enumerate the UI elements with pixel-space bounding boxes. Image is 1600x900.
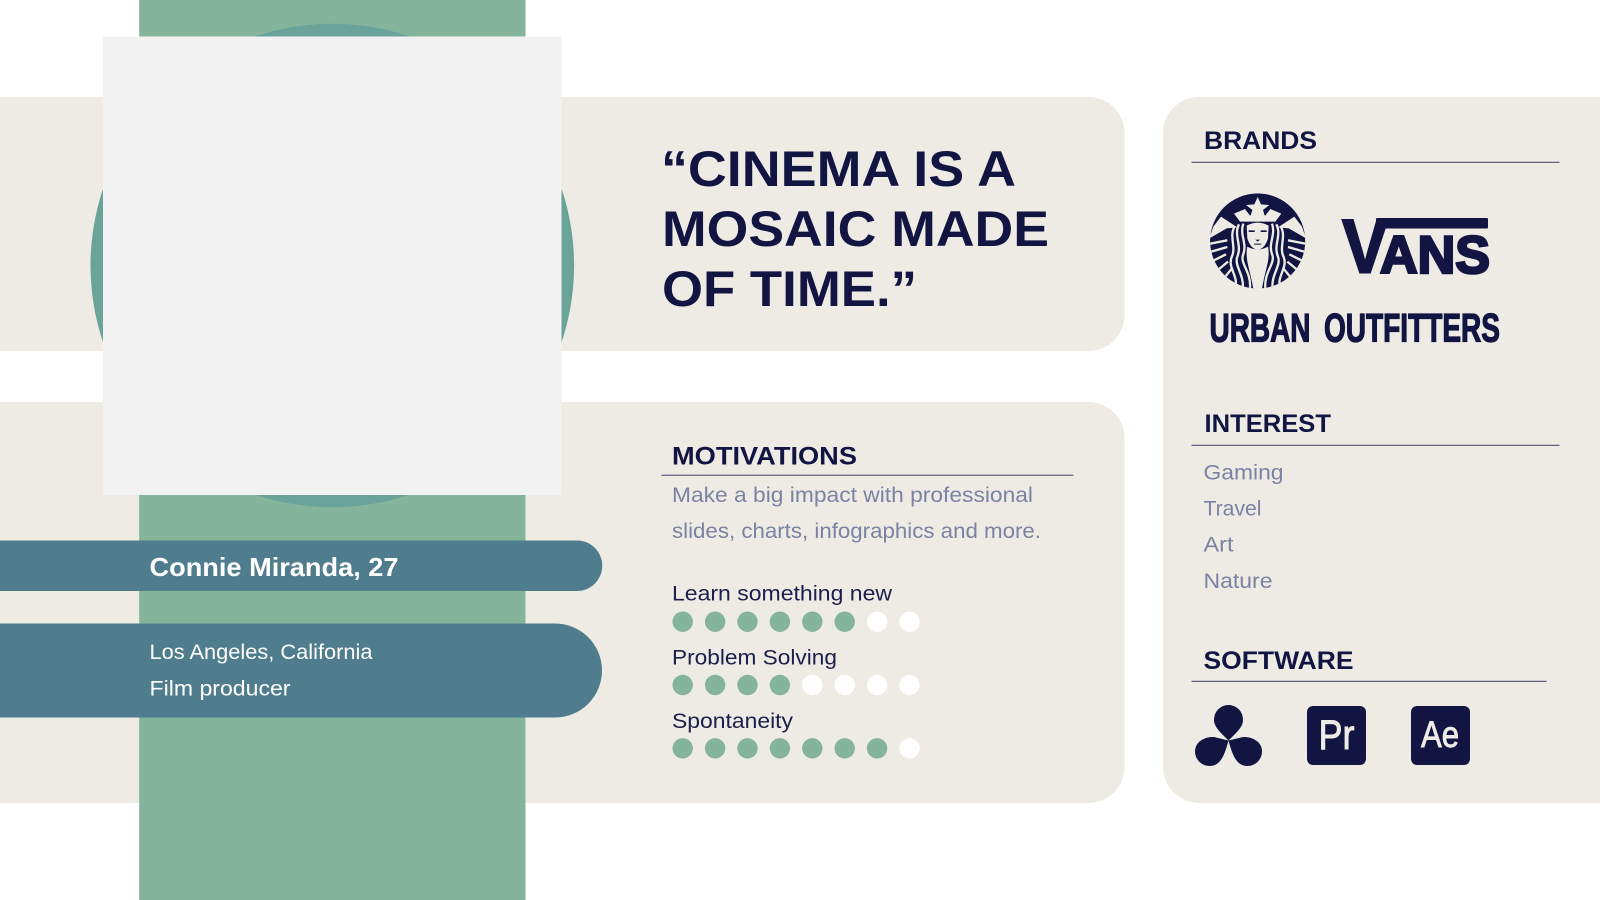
motivations section xyxy=(662,442,1074,758)
rating: learn something new xyxy=(672,582,920,632)
icon: premiere pro: Pr xyxy=(1318,711,1355,758)
icon: davinci resolve xyxy=(1195,705,1262,766)
panel: motivations background xyxy=(0,402,1124,803)
quote: “CINEMA IS A xyxy=(661,141,1016,197)
rating: problem solving: Problem Solving xyxy=(672,646,837,670)
motivations description xyxy=(672,484,1041,543)
interest list xyxy=(1204,462,1284,593)
name: Connie Miranda, 27 xyxy=(150,552,398,582)
icon: starbucks logo xyxy=(1207,193,1309,289)
rating: learn something new: Learn something new xyxy=(672,582,893,606)
rating: spontaneity: Spontaneity xyxy=(672,710,794,733)
interest section xyxy=(1192,410,1560,593)
icon: after effects xyxy=(1411,706,1470,765)
panel: quote background xyxy=(0,97,1124,351)
quote: MOSAIC MADE xyxy=(662,201,1049,257)
icon: vans logo: V xyxy=(1342,204,1388,290)
motivations description: slides, charts, infographics and more. xyxy=(672,520,1041,543)
name bar xyxy=(0,540,602,591)
icon: vans logo: ANS xyxy=(1380,226,1490,285)
interest list: Nature xyxy=(1204,570,1272,593)
icon: vans logo xyxy=(1342,204,1490,290)
interest list: Travel xyxy=(1204,498,1262,520)
portrait placeholder xyxy=(103,36,562,495)
brands heading: BRANDS xyxy=(1204,127,1317,155)
urban outfitters logo: URBAN xyxy=(1210,306,1310,350)
urban outfitters logo: OUTFITTERS xyxy=(1324,306,1500,350)
rating: spontaneity xyxy=(672,710,920,758)
location: Los Angeles, California xyxy=(150,641,373,664)
interest list: Gaming xyxy=(1204,462,1284,484)
interest list: Art xyxy=(1204,534,1234,556)
teal circle behind portrait xyxy=(90,24,574,507)
motivations heading: MOTIVATIONS xyxy=(672,442,857,470)
panel: right sidebar background xyxy=(1163,97,1600,803)
motivations description: Make a big impact with professional xyxy=(672,484,1033,507)
green vertical column xyxy=(139,0,525,900)
interest heading: INTEREST xyxy=(1204,410,1331,438)
urban outfitters logo xyxy=(1210,306,1500,350)
icon: after effects: Ae xyxy=(1421,714,1459,755)
quote: OF TIME.” xyxy=(662,261,917,317)
rating: problem solving xyxy=(672,646,920,695)
software heading: SOFTWARE xyxy=(1204,647,1354,675)
location and role bar xyxy=(0,624,602,718)
icon: premiere pro xyxy=(1307,706,1366,765)
role: Film producer xyxy=(150,678,291,700)
quote xyxy=(661,141,1049,317)
